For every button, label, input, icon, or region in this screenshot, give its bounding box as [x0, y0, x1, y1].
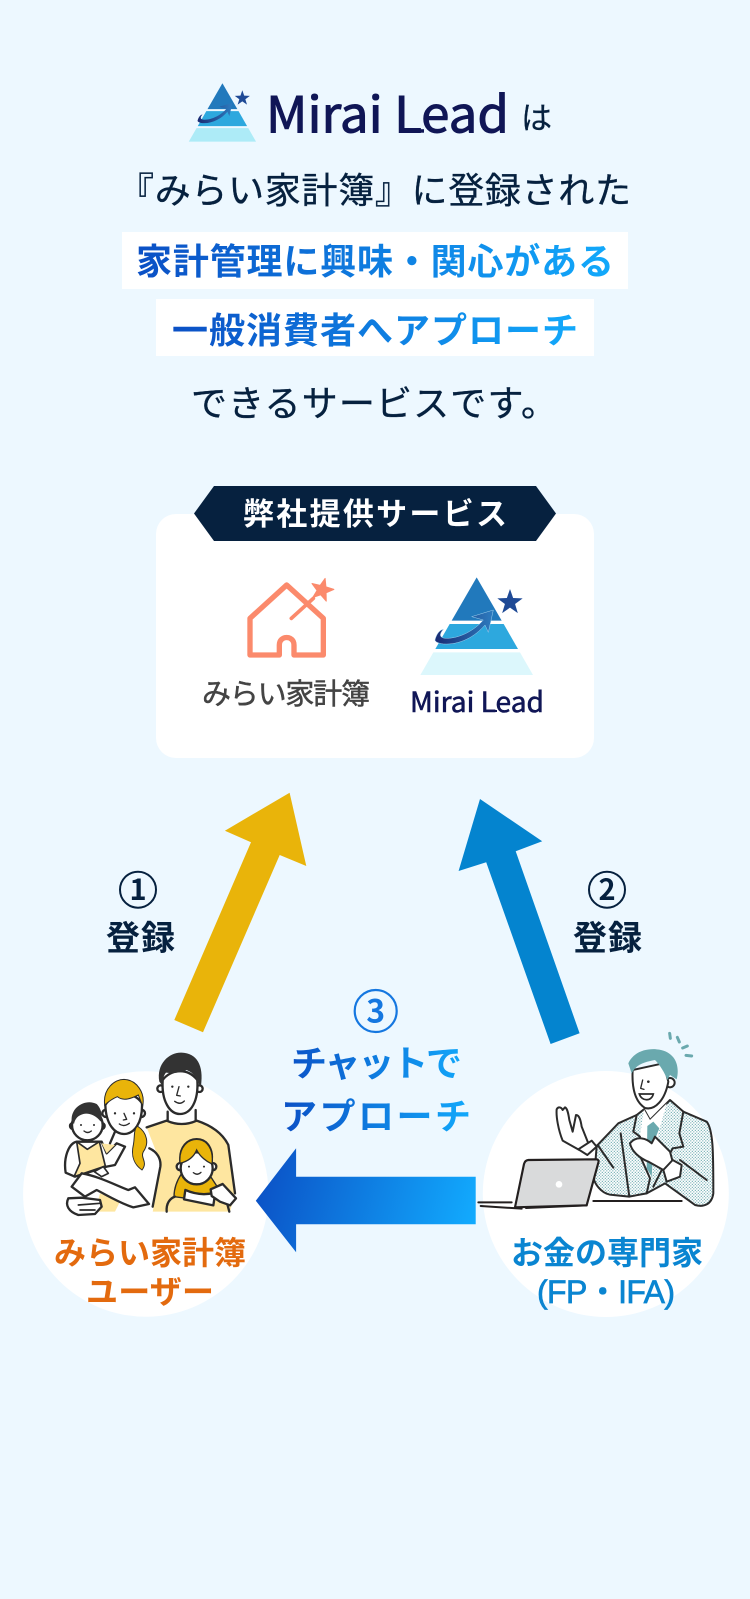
laptop	[515, 1159, 599, 1207]
label: step 3: チャットで	[291, 1035, 462, 1087]
icon: small Mirai Lead pyramid logo	[189, 83, 256, 142]
illustration: expert with laptop	[478, 1033, 713, 1209]
arrow: yellow registration	[174, 793, 306, 1032]
circle: family users	[23, 1053, 268, 1317]
head	[628, 1049, 678, 1108]
logo: Mirai Lead pyramid	[420, 577, 533, 675]
mother	[65, 1079, 161, 1212]
highlight line 2: 一般消費者へアプローチ	[172, 302, 578, 354]
logo text: Mirai Lead: Mirai Lead	[410, 681, 544, 721]
label: みらい家計簿ユーザー	[54, 1228, 246, 1313]
label: みらい家計簿ユーザー: みらい家計簿	[54, 1228, 246, 1274]
label: step 1	[106, 867, 175, 960]
shirt and tie	[638, 1103, 667, 1177]
label: step 2: 登録	[573, 911, 642, 960]
Mirai Lead wordmark: Mirai Lead	[266, 76, 509, 148]
text: line 2: 『みらい家計簿』に登録された	[118, 162, 631, 214]
girl right	[167, 1139, 236, 1212]
label: お金の専門家	[511, 1228, 703, 1310]
particle は: は	[521, 93, 552, 138]
banner: 弊社提供サービス: 弊社提供サービス	[243, 489, 507, 534]
label: step 1: 登録	[106, 911, 175, 960]
sparks	[670, 1033, 692, 1056]
highlight line 1: 家計管理に興味・関心がある	[136, 233, 614, 285]
label: step 3	[281, 986, 471, 1140]
label: step 2	[573, 867, 642, 960]
arrow: gradient chat approach	[256, 1148, 476, 1252]
label: お金の専門家: (FP・IFA)	[537, 1274, 675, 1310]
mother's arms	[67, 1167, 149, 1215]
label: step 3: 3	[366, 986, 385, 1032]
clapping hand	[630, 1137, 673, 1170]
panel background	[156, 514, 594, 758]
suit	[594, 1100, 713, 1206]
logo text: みらい家計簿: みらい家計簿	[202, 671, 370, 713]
logo: みらい家計簿 house	[250, 575, 336, 655]
child left	[65, 1102, 125, 1212]
illustration: family	[65, 1053, 236, 1215]
father	[147, 1053, 235, 1212]
text: line 5: できるサービスです。	[191, 375, 557, 427]
label: お金の専門家: お金の専門家	[511, 1228, 703, 1274]
label: step 1: 1	[129, 867, 147, 909]
label: みらい家計簿ユーザー: ユーザー	[86, 1267, 214, 1313]
panel: services	[156, 486, 594, 758]
circle: financial experts	[478, 1033, 729, 1317]
label: step 3: アプローチ	[281, 1088, 471, 1140]
arrow: blue registration	[459, 799, 580, 1044]
heading: Mirai Lead logo line	[189, 76, 552, 148]
banner: 弊社提供サービス	[194, 486, 556, 541]
label: step 2: 2	[598, 867, 616, 909]
raised hand	[557, 1107, 588, 1150]
